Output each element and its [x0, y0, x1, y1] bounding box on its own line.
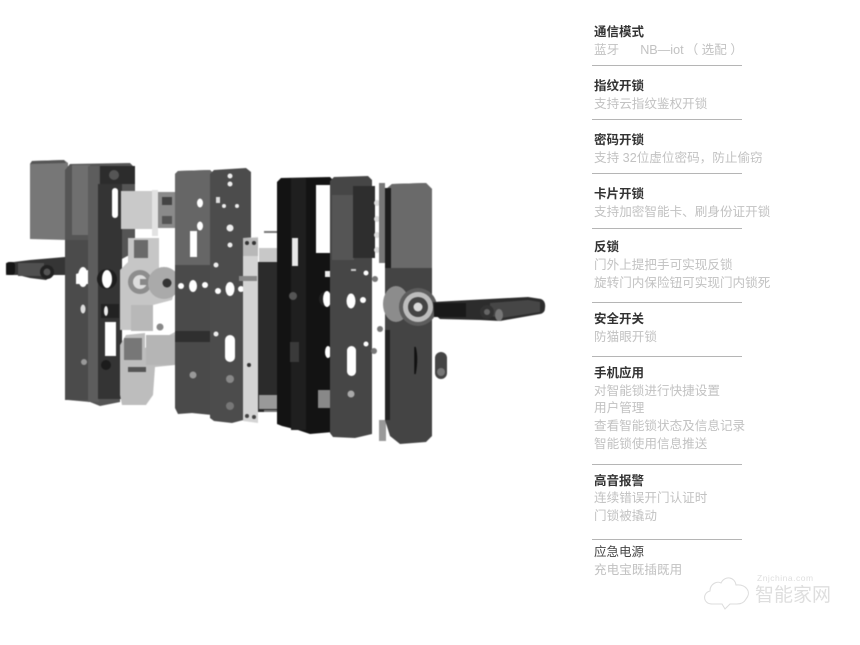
- rotating knob: [383, 286, 437, 326]
- steel strip: [239, 237, 258, 423]
- battery cover flap: [30, 160, 68, 240]
- spec: communication mode: 通信模式: [594, 25, 644, 39]
- keyhole cover cap: [435, 352, 447, 379]
- spec: high-volume alarm: 连续错误开门认证时: [594, 491, 707, 505]
- circuit board with pins: [353, 186, 380, 258]
- spec: card unlock: [594, 187, 770, 219]
- spec: password unlock: [594, 133, 763, 165]
- front panel: [385, 183, 432, 444]
- spec: mobile app: 手机应用: [594, 366, 644, 380]
- spec: mobile app: 用户管理: [594, 401, 644, 415]
- spec: mobile app: 对智能锁进行快捷设置: [594, 384, 720, 398]
- rear body shell: [65, 163, 135, 406]
- spec: safety switch: 防猫眼开锁: [594, 330, 657, 344]
- latch bracket behind frame: [257, 231, 280, 412]
- lock mechanism: [120, 190, 180, 405]
- spec: password unlock: 密码开锁: [594, 133, 644, 147]
- spec: emergency power: [594, 545, 682, 577]
- black mounting frame: [277, 177, 335, 434]
- spec: anti-lock: [594, 240, 770, 290]
- spec: emergency power: 充电宝既插既用: [594, 563, 682, 577]
- spec: high-volume alarm: 门锁被撬动: [594, 509, 657, 523]
- spec: safety switch: 安全开关: [594, 312, 644, 326]
- spec: fingerprint unlock: 支持云指纹鉴权开锁: [594, 97, 707, 111]
- watermark logo: [704, 573, 831, 610]
- spec: mobile app: 智能锁使用信息推送: [594, 437, 707, 451]
- spec: high-volume alarm: 高音报警: [594, 474, 644, 488]
- watermark text: 智能家网: [755, 585, 831, 606]
- icon: cloud: [704, 578, 749, 610]
- spec: card unlock: 卡片开锁: [594, 187, 644, 201]
- spec: fingerprint unlock: 指纹开锁: [594, 79, 644, 93]
- outer handle: [6, 257, 65, 280]
- watermark text: [755, 573, 831, 606]
- spec: anti-lock: 反锁: [594, 240, 619, 254]
- spec: password unlock: 支持 32位虚位密码，防止偷窃: [594, 151, 763, 165]
- spec: safety switch: [594, 312, 657, 344]
- interior handle: [433, 297, 545, 321]
- front side bracket: [371, 183, 386, 441]
- spec: emergency power: 应急电源: [594, 545, 644, 559]
- spec: mobile app: 查看智能锁状态及信息记录: [594, 419, 745, 433]
- spec: anti-lock: 旋转门内保险钮可实现门内锁死: [594, 276, 770, 290]
- spec: mobile app: [594, 366, 745, 451]
- watermark text: Znjchina.com: [757, 573, 814, 583]
- back plate right: [210, 168, 251, 423]
- back plate left: [175, 170, 212, 415]
- front mounting plate: [330, 176, 372, 438]
- spec: card unlock: 支持加密智能卡、刷身份证开锁: [594, 205, 770, 219]
- spec: anti-lock: 门外上提把手可实现反锁: [594, 258, 733, 272]
- spec: high-volume alarm: [594, 474, 707, 523]
- spec: fingerprint unlock: [594, 79, 707, 111]
- spec: communication mode: 蓝牙 NB—iot（ 选配 ）: [594, 43, 743, 57]
- spec: communication mode: [594, 25, 743, 57]
